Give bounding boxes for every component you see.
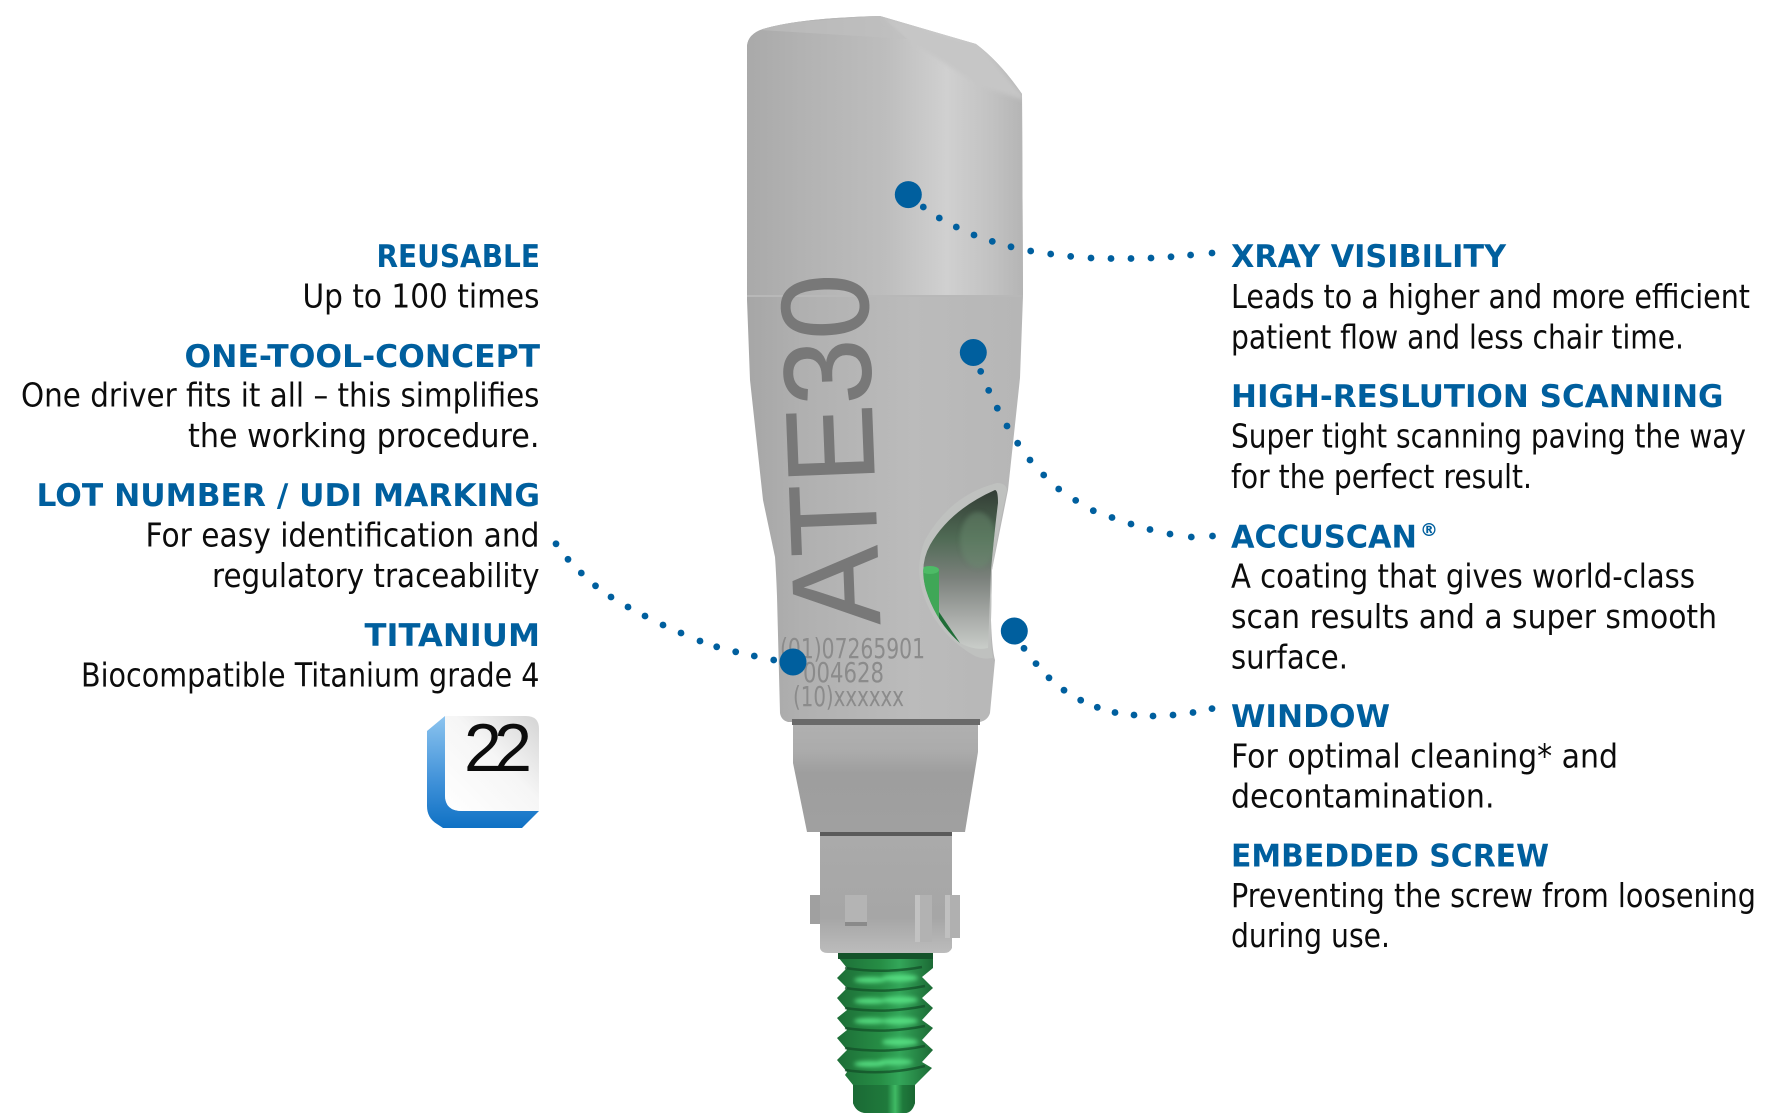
lower collar with tabs — [810, 832, 960, 953]
left text: lot number — [36, 478, 540, 595]
right text: embedded screw: EMBEDDED SCREW — [1231, 838, 1549, 874]
callout: window dotted leader — [1001, 618, 1215, 719]
left text: one-tool-concept — [21, 339, 540, 455]
right text: accuscan: scan results and a super smooth — [1231, 597, 1717, 636]
icon: calendar 22 — [427, 710, 539, 828]
right text: xray visibility: XRAY VISIBILITY — [1231, 239, 1507, 275]
right text: high-resolution scanning: HIGH-RESLUTION SCANNING — [1231, 379, 1724, 415]
right text: accuscan: ® — [1420, 520, 1438, 541]
left text: one-tool-concept: the working procedure. — [188, 416, 540, 455]
left text: titanium: TITANIUM — [364, 618, 540, 654]
left text: lot number: LOT NUMBER / UDI MARKING — [36, 478, 540, 514]
callout: accuscan dotted leader — [960, 339, 1216, 540]
left text: reusable — [302, 239, 540, 316]
left text: titanium — [81, 618, 540, 694]
right text: window — [1231, 699, 1618, 816]
right text: window: For optimal cleaning* and — [1231, 736, 1618, 776]
right text: high-resolution scanning: for the perfect result. — [1231, 457, 1532, 496]
engraved code lines — [780, 632, 925, 713]
right text: accuscan — [1231, 520, 1717, 676]
right text: embedded screw: during use. — [1231, 916, 1390, 955]
icon: calendar 22: 22 — [464, 710, 532, 786]
left text: lot number: For easy identification and — [146, 516, 540, 554]
right text: xray visibility: patient flow and less chair time. — [1231, 318, 1684, 356]
left text: one-tool-concept: One driver fits it all – this simplifies — [21, 376, 540, 414]
window cut-out — [919, 483, 1007, 659]
left text: titanium: Biocompatible Titanium grade 4 — [81, 656, 540, 694]
left text: reusable: REUSABLE — [376, 239, 540, 275]
product: ATE30 abutment — [745, 10, 1025, 1113]
left text: reusable: Up to 100 times — [302, 276, 540, 316]
neck — [792, 719, 980, 832]
right text: accuscan: surface. — [1231, 638, 1348, 676]
engraved code lines: (10)xxxxxx — [793, 680, 904, 713]
right text: embedded screw — [1231, 838, 1756, 955]
left text: lot number: regulatory traceability — [212, 556, 540, 595]
abutment main body — [745, 10, 1025, 722]
right text: accuscan: ACCUSCAN — [1231, 520, 1417, 556]
engraved ATE30 label: ATE30 — [756, 271, 907, 628]
right text: high-resolution scanning — [1231, 379, 1746, 496]
right text: window: WINDOW — [1231, 699, 1390, 735]
right text: window: decontamination. — [1231, 776, 1494, 816]
callout: lot number dotted leader — [553, 540, 806, 676]
engraved code lines: (01)07265901 — [780, 632, 925, 665]
right text: accuscan: A coating that gives world-class — [1231, 556, 1695, 596]
right text: xray visibility — [1231, 239, 1750, 356]
green screw thread — [837, 953, 933, 1113]
callout: xray visibility dotted leader — [895, 181, 1215, 262]
engraved code lines: 004628 — [803, 656, 884, 689]
left text: one-tool-concept: ONE-TOOL-CONCEPT — [184, 339, 540, 375]
